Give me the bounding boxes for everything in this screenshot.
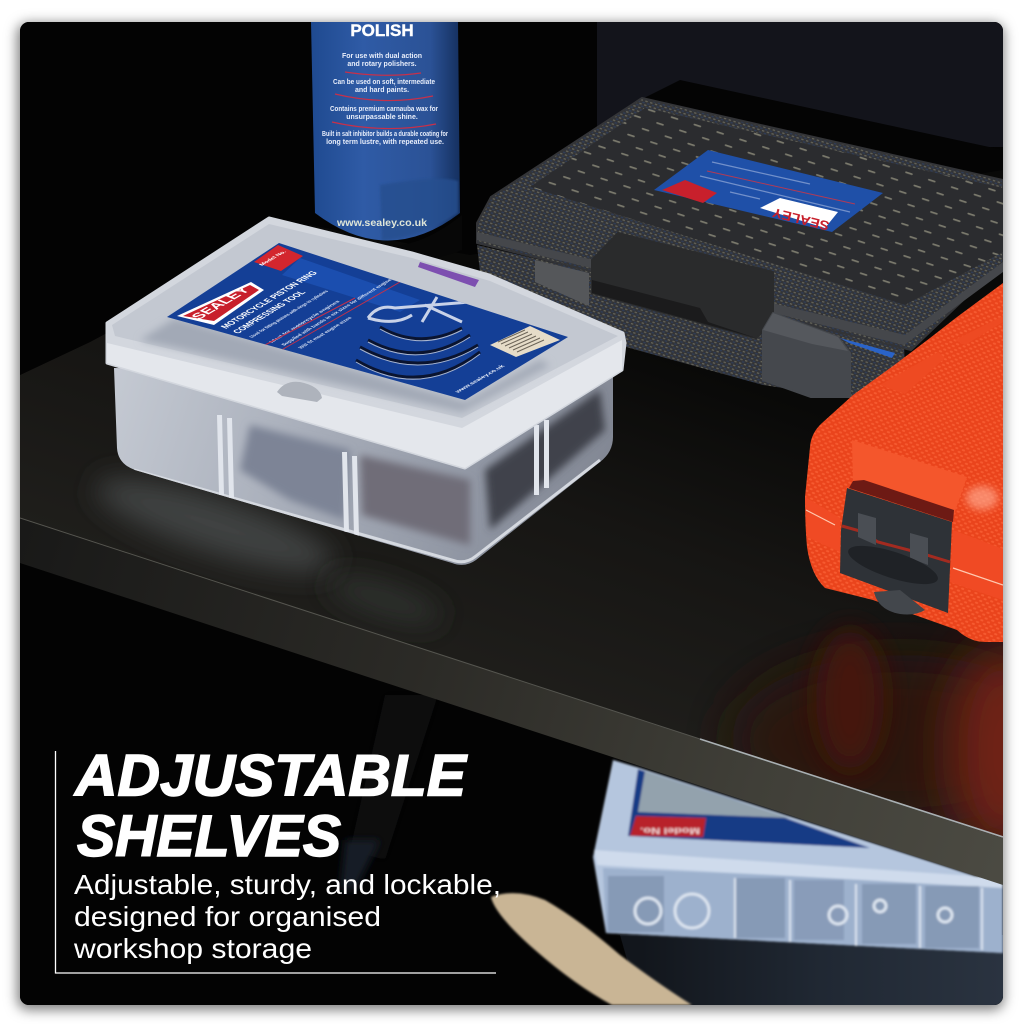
- tool drawing: [368, 297, 470, 322]
- red carry case: [805, 283, 1003, 642]
- label bullets: Ideal for motorcycle engines: [268, 300, 342, 344]
- label bullets: Used for fitting pistons with rings to cylinders: [248, 290, 330, 339]
- box paper label: SEALEY: [188, 285, 255, 321]
- blue case label: SEALEY: [770, 205, 831, 234]
- blue strip: [840, 338, 895, 358]
- red case seam band: [805, 497, 1003, 600]
- blue polish bottle: POLISH: [350, 21, 414, 40]
- shelf front edge: [20, 518, 1003, 885]
- text block frame: [56, 751, 496, 973]
- case corner block: [763, 313, 850, 397]
- red case smooth raised bands: [880, 316, 1003, 394]
- lower parts box: Model No.: [640, 826, 700, 835]
- blue polish bottle: Built in salt inhibitor builds a durable coating for: [322, 131, 448, 138]
- barcode: [490, 326, 560, 357]
- lower parts box: [593, 760, 1003, 953]
- latch top lip: [849, 480, 954, 522]
- compartments: [603, 868, 1003, 953]
- box lid disc: [277, 382, 322, 402]
- case seam: [477, 232, 1003, 345]
- box paper label: COMPRESSING TOOL: [231, 289, 309, 335]
- case base: [477, 245, 905, 398]
- blue polish bottle: and rotary polishers.: [347, 61, 417, 68]
- box contents: [134, 390, 605, 562]
- box lid rim: [107, 218, 625, 468]
- label bullets: Supplied with bands in six sizes for different engines: [280, 277, 396, 347]
- label title: MOTORCYCLE PISTON RING: [219, 270, 320, 330]
- compression bands: [356, 327, 480, 377]
- red model tag: [254, 245, 303, 271]
- case hinge: [535, 260, 589, 306]
- red tag: [630, 816, 706, 837]
- case lid top: [530, 108, 1003, 305]
- wooden tool: [491, 893, 692, 1005]
- blue polish bottle: long term lustre, with repeated use.: [326, 139, 444, 146]
- blue polish bottle: For use with dual action: [342, 53, 422, 60]
- SEALEY logo: [177, 282, 264, 325]
- latch plate: [840, 488, 952, 613]
- box paper label: [167, 243, 568, 400]
- heading: ADJUSTABLE: [73, 744, 468, 808]
- description text: workshop storage: [73, 933, 312, 964]
- box lid top: [112, 224, 618, 418]
- purple tab: [418, 262, 479, 287]
- box paper label: Model No.: [258, 250, 289, 267]
- label bullets: Will fit most engine sizes: [297, 316, 354, 350]
- blue polish bottle: Can be used on soft, intermediate: [333, 79, 435, 86]
- blue polish bottle: www.sealey.co.uk: [336, 218, 427, 229]
- box body: [114, 368, 613, 565]
- case lid side: [477, 98, 1003, 350]
- latch foot: [874, 590, 925, 614]
- shelf top surface: [20, 334, 1003, 838]
- description text: designed for organised: [74, 901, 381, 932]
- blue polish bottle: unsurpassable shine.: [346, 114, 418, 121]
- black carry case: [477, 98, 1003, 398]
- red case shell: [805, 283, 1003, 642]
- label website: www.sealey.co.uk: [453, 364, 507, 394]
- red case recessed panel: [852, 440, 967, 517]
- case large clasp: [592, 233, 773, 338]
- heading: [73, 744, 468, 869]
- description text: Adjustable, sturdy, and lockable,: [74, 869, 501, 900]
- blue polish bottle: [311, 21, 462, 259]
- blue polish bottle: Contains premium carnauba wax for: [330, 106, 438, 113]
- label bullets: [248, 277, 396, 350]
- blue case label: [654, 150, 883, 234]
- clear plastic storage box: [107, 218, 625, 565]
- description text: [73, 869, 501, 964]
- blue polish bottle: and hard paints.: [355, 87, 409, 94]
- red case highlight: [966, 486, 998, 510]
- lower storage area: [340, 695, 1003, 1005]
- latch oval: [844, 538, 942, 592]
- heading: SHELVES: [77, 804, 341, 869]
